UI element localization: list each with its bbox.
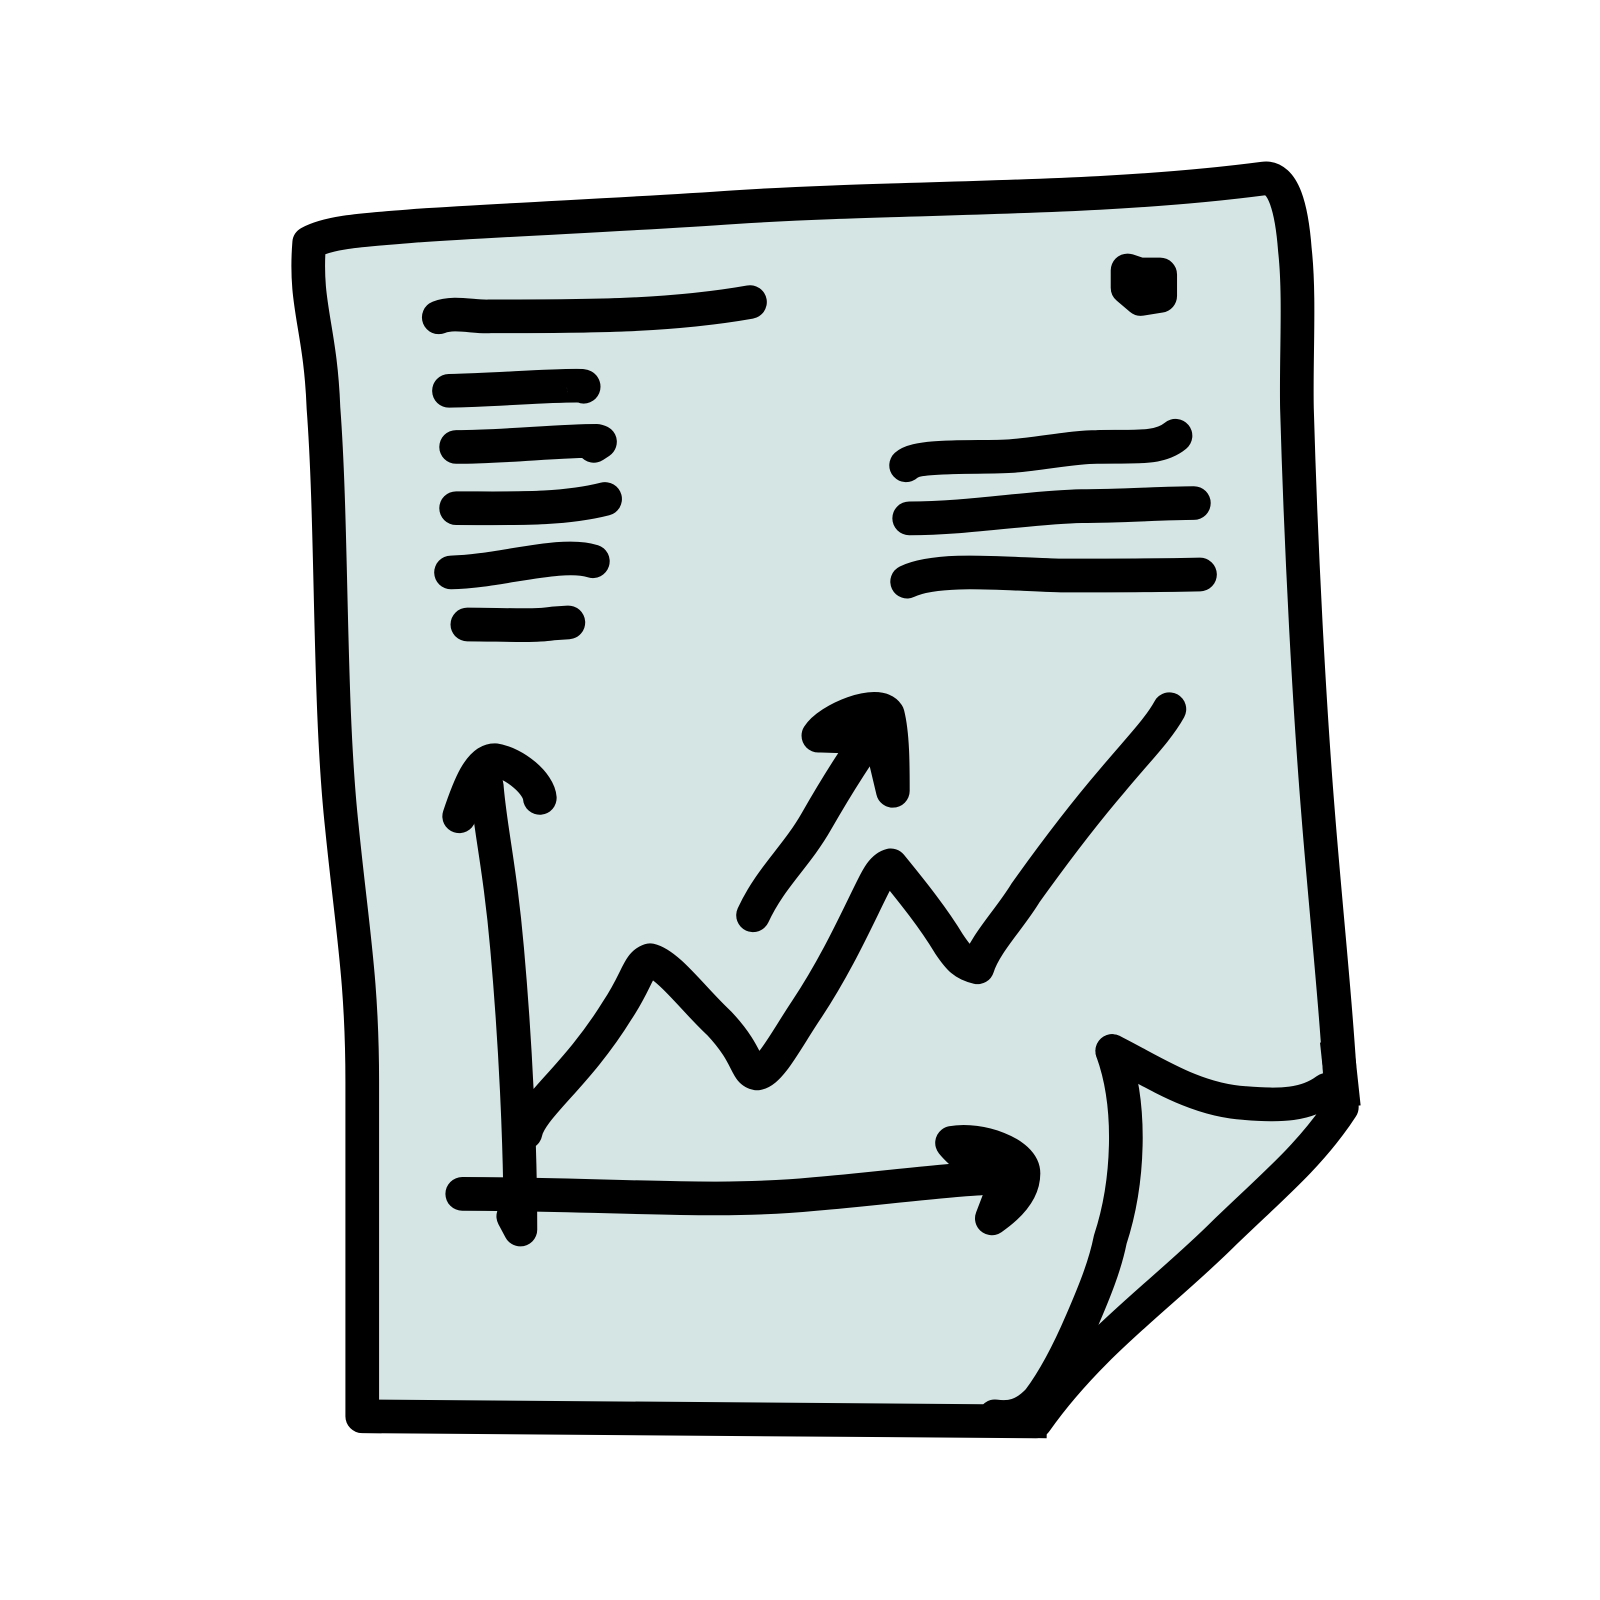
arrow: x axis [462, 1142, 1023, 1218]
folded corner [995, 1051, 1327, 1417]
sheet fill and outline [308, 178, 1342, 1421]
text line 3 [907, 572, 1200, 582]
text line 1 [906, 436, 1176, 465]
zigzag data line [526, 709, 1169, 1133]
arrow: y axis [459, 760, 540, 1230]
left text block [449, 386, 605, 625]
line chart [459, 709, 1169, 1230]
text line 5 [467, 622, 568, 625]
x axis arrowhead [952, 1142, 1023, 1218]
text line 2 [909, 503, 1194, 518]
text line 4 [451, 558, 593, 572]
trend arrowhead [818, 709, 893, 791]
text line 2 [456, 441, 600, 447]
text line 1 [449, 386, 584, 391]
text line 3 [456, 499, 605, 508]
square bottom-left paper edge [990, 1420, 1047, 1421]
trend shaft [753, 724, 880, 915]
right text block [906, 436, 1200, 582]
paper sheet [308, 178, 1344, 1421]
y axis shaft [487, 786, 520, 1230]
fold top edge [1112, 1051, 1327, 1104]
square mark at top right [1128, 270, 1160, 299]
square right paper edge end [1337, 1041, 1344, 1107]
arrow: growth trend [753, 709, 893, 915]
x axis shaft [462, 1179, 980, 1198]
fold left edge [995, 1051, 1126, 1417]
y axis arrowhead [459, 760, 540, 816]
header text line [439, 302, 750, 317]
